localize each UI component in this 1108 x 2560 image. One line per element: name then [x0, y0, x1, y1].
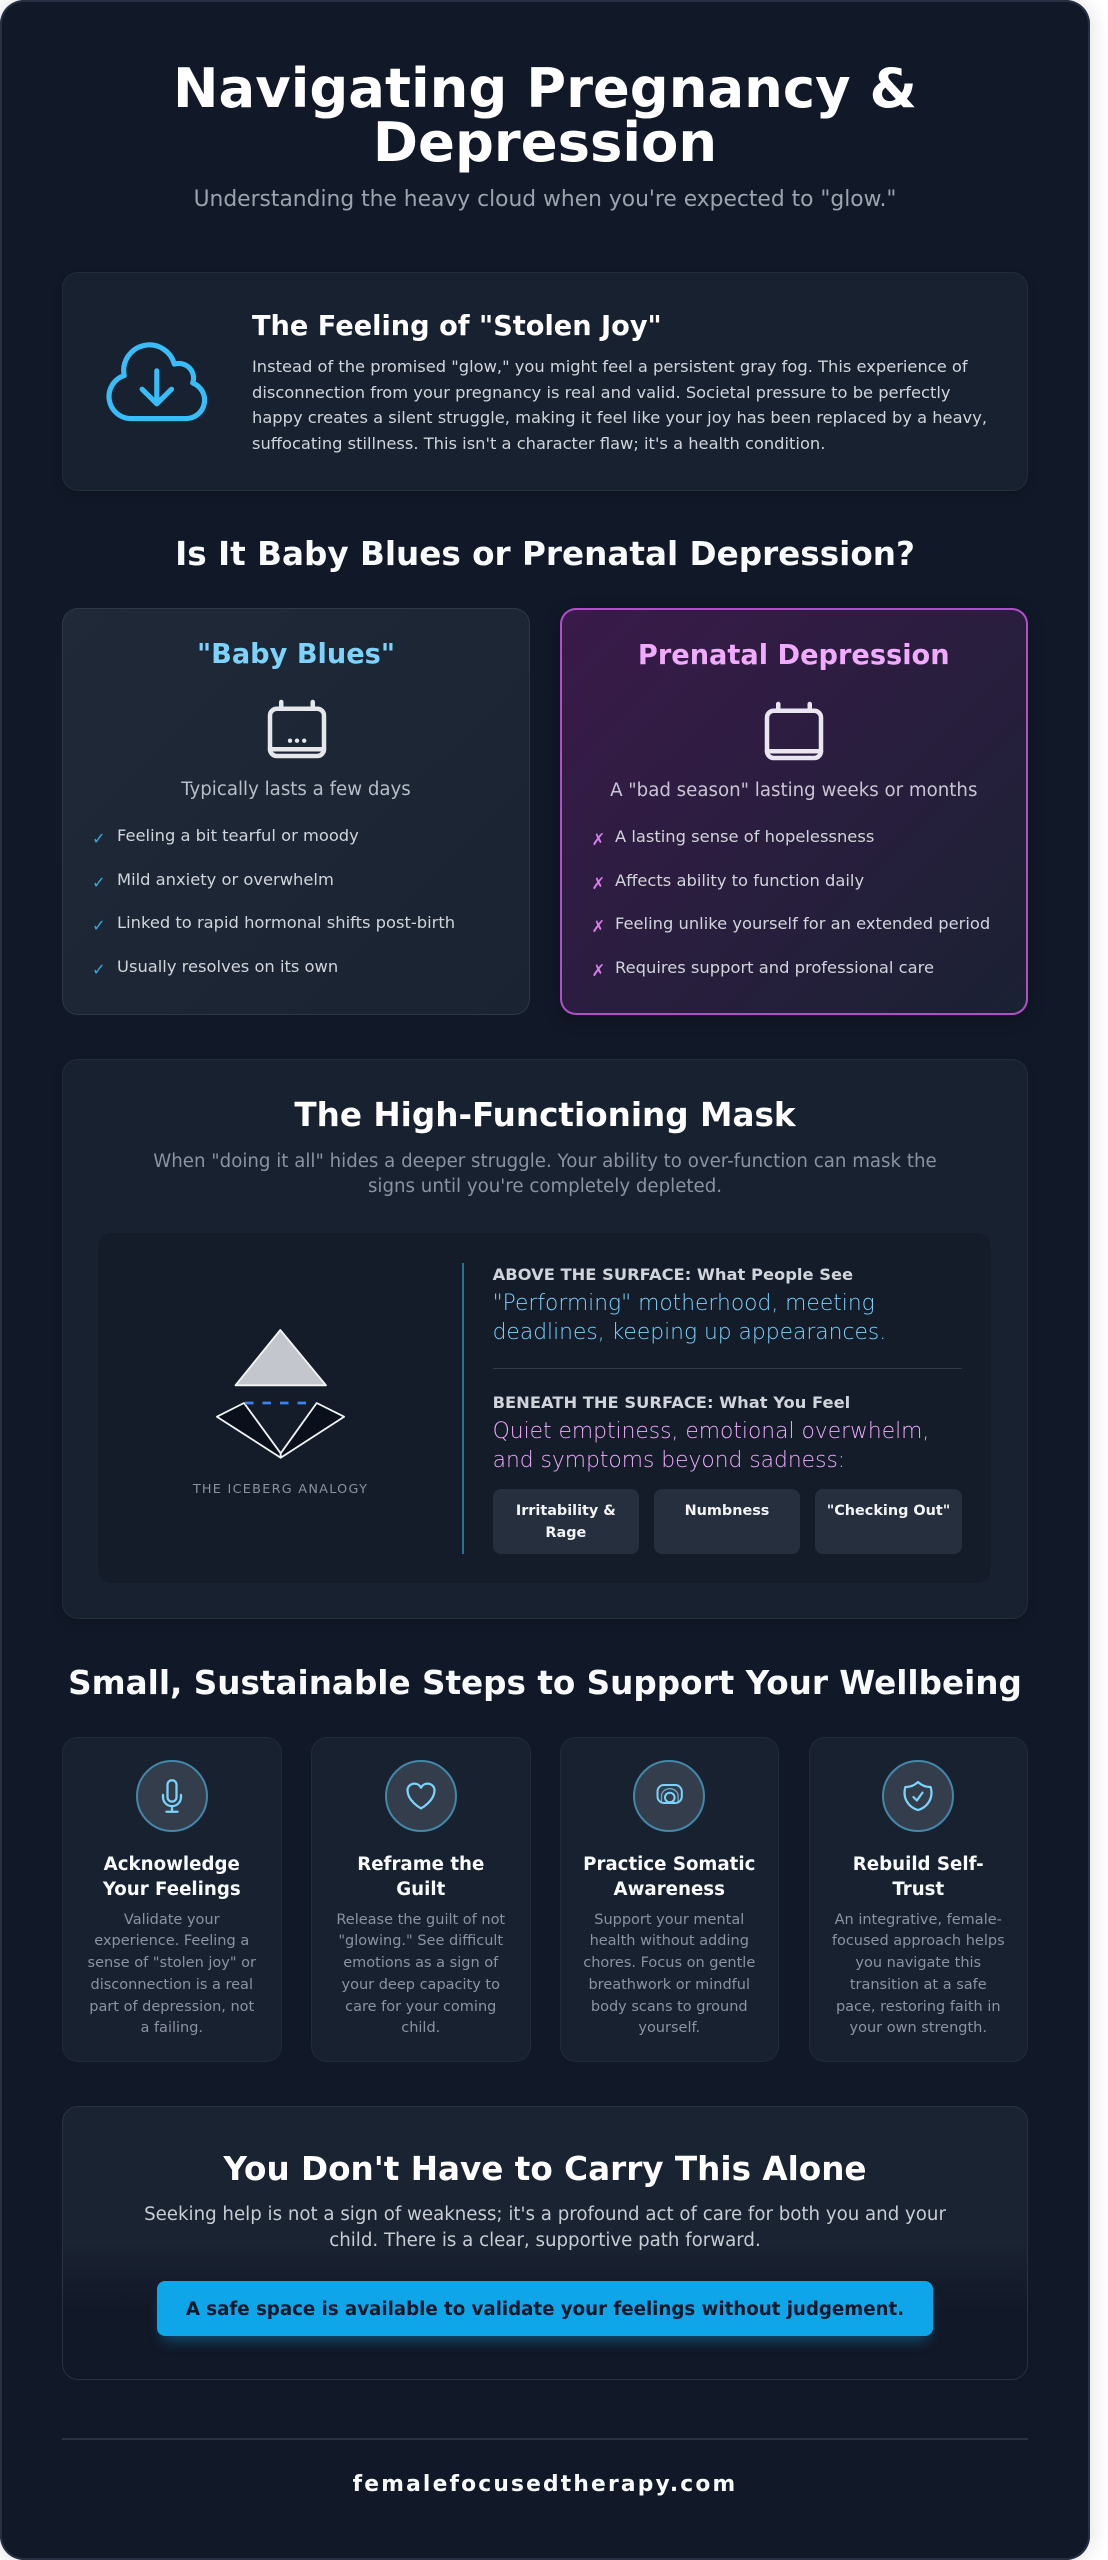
text block: what people see: "Performing" motherhood, meeting	[493, 1291, 875, 1316]
step text: your own strength.	[850, 2020, 987, 2036]
divider line: footer	[62, 2438, 1028, 2440]
text block: stolen joy: disconnection from your pregnancy is real and valid. Societal pressure to be perfectly	[252, 383, 951, 402]
text block: call to action: child. There is a clear, supportive path forward.	[329, 2230, 761, 2250]
title	[173, 57, 917, 174]
step text: chores. Focus on gentle	[583, 1955, 755, 1971]
duration: weeks or months: A "bad season" lasting weeks or months	[610, 780, 977, 801]
label: above the surface: ABOVE THE SURFACE: What People See	[493, 1265, 853, 1284]
panel: stolen joy	[62, 272, 1028, 491]
text block: stolen joy: suffocating stillness. This isn't a character flaw; it's a health condition.	[252, 434, 825, 453]
step text: disconnection is a real	[91, 1977, 253, 1993]
text: beneath the surface	[493, 1393, 929, 1473]
step text: sense of "stolen joy" or	[88, 1955, 256, 1971]
text block: mask intro	[153, 1150, 937, 1197]
list item: Linked to rapid hormonal shifts post-birth	[117, 913, 455, 932]
heading: prenatal depression: Prenatal Depression	[638, 640, 950, 671]
text: above the surface	[492, 1265, 886, 1345]
divider line: vertical accent	[462, 1263, 464, 1554]
chip label: Rage	[545, 1525, 586, 1541]
chip label: Irritability &	[516, 1503, 616, 1519]
caption: iceberg analogy: THE ICEBERG ANALOGY	[193, 1482, 368, 1497]
chip label	[516, 1503, 616, 1541]
title: Depression	[373, 111, 717, 174]
step text: body scans to ground	[591, 1999, 748, 2015]
heading: baby blues: "Baby Blues"	[197, 638, 395, 670]
chip: irritability	[493, 1489, 639, 1554]
icon: somatic awareness	[633, 1760, 705, 1832]
step text: experience. Feeling a	[94, 1933, 249, 1949]
step text: pace, restoring faith in	[836, 1999, 1001, 2015]
text block: stolen joy	[252, 357, 987, 453]
button: safe space	[157, 2281, 933, 2336]
step text: yourself.	[638, 2020, 700, 2036]
text block: what people see: deadlines, keeping up appearances.	[493, 1320, 886, 1345]
panel: call to action	[62, 2106, 1028, 2380]
step title	[357, 1854, 484, 1900]
step title: Awareness	[614, 1879, 725, 1900]
panel: prenatal depression	[560, 608, 1028, 1015]
panel: step acknowledge	[62, 1737, 282, 2062]
list item: ✓	[92, 916, 106, 935]
text block: call to action	[144, 2204, 946, 2250]
step text: Support your mental	[594, 1912, 744, 1928]
heading: high-functioning mask: The High-Functioning Mask	[294, 1096, 796, 1134]
panel: step reframe	[311, 1737, 530, 2062]
label: beneath the surface: BENEATH THE SURFACE: What You Feel	[493, 1393, 850, 1412]
icon: cloud with down arrow	[106, 342, 208, 422]
step text: your deep capacity to	[342, 1977, 500, 1993]
step text: child.	[401, 2020, 440, 2036]
step title	[583, 1854, 755, 1900]
text block: what people see	[493, 1291, 886, 1345]
title: Navigating Pregnancy &	[173, 57, 917, 120]
text block: stolen joy: Instead of the promised "glow," you might feel a persistent gray fog. This experience of	[252, 357, 968, 376]
list item: Usually resolves on its own	[117, 957, 338, 976]
step text: "glowing." See difficult	[338, 1933, 503, 1949]
text block: mask intro: signs until you're completely depleted.	[368, 1176, 722, 1197]
step text: you navigate this	[855, 1955, 981, 1971]
step title: Your Feelings	[103, 1879, 241, 1900]
step text: health without adding	[590, 1933, 749, 1949]
panel: baby blues	[62, 608, 530, 1015]
heading: small steps: Small, Sustainable Steps to Support Your Wellbeing	[68, 1664, 1022, 1702]
list item: ✓	[92, 829, 106, 848]
list item: ✗	[592, 874, 605, 893]
list item: Mild anxiety or overwhelm	[117, 870, 334, 889]
step title: Reframe the	[357, 1854, 484, 1875]
panel: step self-trust	[808, 1737, 1028, 2062]
list item: ✓	[92, 960, 106, 979]
heading: call to action: You Don't Have to Carry This Alone	[223, 2150, 867, 2188]
step text	[88, 1912, 256, 2036]
heading: comparison: Is It Baby Blues or Prenatal Depression?	[175, 535, 915, 573]
step text: emotions as a sign of	[343, 1955, 498, 1971]
text block: what you feel: and symptoms beyond sadness:	[493, 1448, 845, 1473]
text block: what you feel	[493, 1419, 929, 1473]
list item: ✗	[592, 917, 605, 936]
step text: Release the guilt of not	[336, 1912, 505, 1928]
text block: call to action: Seeking help is not a sign of weakness; it's a profound act of care for both you and your	[144, 2204, 946, 2224]
step title: Acknowledge	[104, 1854, 240, 1875]
icon: microphone	[136, 1760, 208, 1832]
panel: step somatic	[560, 1737, 779, 2062]
step title: Rebuild Self-	[853, 1854, 984, 1875]
list item: ✗	[592, 830, 605, 849]
chip: numbness	[654, 1489, 800, 1554]
step text: breathwork or mindful	[588, 1977, 750, 1993]
step text: transition at a safe	[850, 1977, 987, 1993]
step text: part of depression, not	[89, 1999, 254, 2015]
footer: website: femalefocusedtherapy.com	[353, 2472, 737, 2496]
list item: ✗	[592, 961, 605, 980]
icon: shield check	[882, 1760, 954, 1832]
duration: few days: Typically lasts a few days	[181, 779, 411, 800]
step text	[832, 1912, 1005, 2036]
divider line	[493, 1368, 962, 1369]
list item: A lasting sense of hopelessness	[615, 827, 874, 846]
step text: care for your coming	[345, 1999, 496, 2015]
step title: Trust	[892, 1879, 944, 1900]
icon: empty calendar	[764, 702, 824, 760]
symptom list: baby blues	[92, 826, 455, 979]
icon: heart	[385, 1760, 457, 1832]
step text: Validate your	[124, 1912, 220, 1928]
step title: Guilt	[396, 1879, 445, 1900]
list item: Affects ability to function daily	[615, 871, 864, 890]
step text	[336, 1912, 505, 2036]
step text: a failing.	[140, 2020, 203, 2036]
step text: focused approach helps	[832, 1933, 1005, 1949]
step title	[102, 1854, 241, 1900]
text block: mask intro: When "doing it all" hides a deeper struggle. Your ability to over-function can mask the	[153, 1150, 937, 1172]
step text: An integrative, female-	[835, 1912, 1002, 1928]
text block: what you feel: Quiet emptiness, emotional overwhelm,	[493, 1419, 929, 1444]
chip label: Numbness	[685, 1503, 769, 1519]
button: safe space: A safe space is available to validate your feelings without judgement.	[186, 2299, 904, 2320]
list item: ✓	[92, 873, 106, 892]
text block: stolen joy: happy creates a silent struggle, making it feel like your joy has been replaced by a heavy,	[252, 408, 987, 427]
list item: Requires support and professional care	[615, 958, 934, 977]
chip: checking out	[815, 1489, 962, 1554]
chart: iceberg diagram	[216, 1329, 345, 1459]
heading: stolen joy: The Feeling of "Stolen Joy"	[252, 310, 662, 342]
subtitle: Understanding the heavy cloud when you're expected to "glow."	[194, 187, 896, 212]
step title: Practice Somatic	[583, 1854, 755, 1875]
icon: calendar with dots	[268, 700, 326, 758]
symptom list: prenatal	[592, 827, 990, 980]
panel: high-functioning mask	[62, 1059, 1028, 1619]
chip label: "Checking Out"	[827, 1503, 950, 1519]
list item: Feeling unlike yourself for an extended period	[615, 914, 990, 933]
list item: Feeling a bit tearful or moody	[117, 826, 359, 845]
panel: iceberg analogy	[98, 1233, 991, 1583]
step title	[853, 1854, 984, 1900]
step text	[583, 1912, 755, 2036]
